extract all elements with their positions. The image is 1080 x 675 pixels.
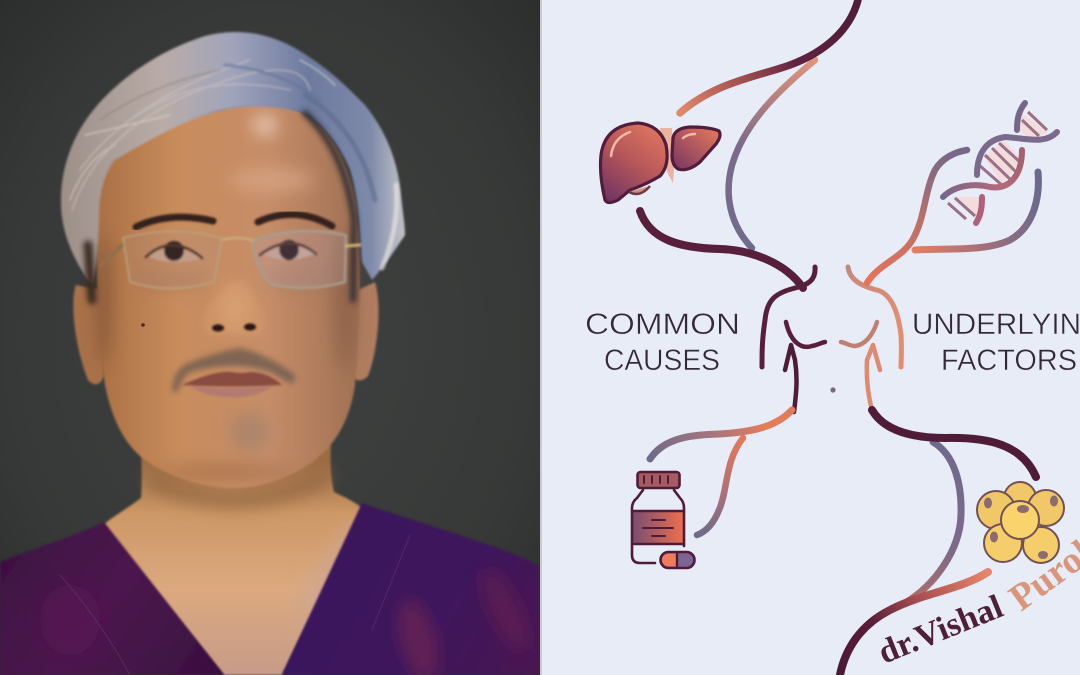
bottle marks xyxy=(643,476,673,536)
left arrow stem xyxy=(785,345,797,412)
panel: portrait photo xyxy=(0,0,540,675)
lips xyxy=(182,372,282,397)
bottle outline xyxy=(632,490,684,563)
icon: DNA helix xyxy=(943,103,1057,223)
text: common causes xyxy=(585,308,740,377)
lower left cell xyxy=(984,524,1022,562)
glasses xyxy=(102,231,360,288)
moustache xyxy=(172,348,296,392)
left panel edge xyxy=(540,0,542,675)
nose xyxy=(202,280,266,337)
heading line: CAUSES: CAUSES xyxy=(604,344,720,377)
bottle label xyxy=(633,511,684,544)
scrub top right side xyxy=(282,503,540,675)
panel: causes and factors diagram xyxy=(540,0,1080,675)
neck shading xyxy=(145,465,360,650)
liver shine xyxy=(611,132,695,156)
liver ligament xyxy=(660,128,674,183)
left lower sub-branch xyxy=(697,438,743,535)
eyebrows xyxy=(136,214,332,227)
face shading and highlights xyxy=(97,115,357,479)
photo background xyxy=(0,0,540,675)
heading line: COMMON: COMMON xyxy=(585,308,740,341)
hair xyxy=(61,32,405,285)
scrub top left side xyxy=(0,522,224,675)
bottle cap xyxy=(638,472,680,488)
DNA strands xyxy=(943,103,1057,223)
scrub highlights xyxy=(40,562,539,675)
bottom branch xyxy=(840,572,988,675)
hair strands xyxy=(70,60,397,268)
liver left lobe xyxy=(600,123,667,202)
left lower branch xyxy=(650,410,792,459)
right lower grey branch xyxy=(905,442,961,603)
left inner curve xyxy=(786,322,825,347)
left cell xyxy=(977,491,1015,529)
right cell xyxy=(1028,490,1064,526)
DNA rung fill xyxy=(952,113,1048,218)
right body outline xyxy=(848,267,901,367)
mole xyxy=(141,323,145,327)
right top branch A xyxy=(867,150,967,283)
ears xyxy=(73,282,379,384)
lower right cell xyxy=(1023,527,1059,563)
DNA rungs xyxy=(948,112,1047,219)
neck xyxy=(103,445,362,675)
front cell xyxy=(1001,501,1039,539)
heading line: FACTORS: FACTORS xyxy=(941,344,1077,377)
center dot xyxy=(830,387,836,393)
scrub seams xyxy=(60,535,410,675)
right inner curve xyxy=(841,322,877,346)
branch: liver dark xyxy=(640,211,803,288)
back cell xyxy=(1004,482,1036,514)
panel background xyxy=(540,0,1080,675)
dark hairline at temples xyxy=(88,113,354,300)
right top branch B xyxy=(915,172,1038,250)
signature name dark: dr.Vishal xyxy=(873,588,1008,671)
left body outline xyxy=(762,267,815,367)
icon: medicine bottle and pill xyxy=(632,472,694,568)
eyes xyxy=(146,240,316,262)
icon: fat cells xyxy=(977,482,1064,563)
branch: top dark to orange xyxy=(680,0,858,113)
text: underlying factors xyxy=(912,308,1080,377)
right arrow stem xyxy=(867,345,880,410)
branch: top grey-orange xyxy=(729,60,815,248)
liver right lobe xyxy=(672,127,720,170)
icon: liver xyxy=(600,123,720,202)
signature: dr.Vishal Purohit xyxy=(873,512,1080,671)
pill xyxy=(660,552,694,568)
right lower dark branch xyxy=(872,410,1036,477)
cell nuclei xyxy=(984,496,1058,559)
face xyxy=(96,104,360,488)
gallbladder xyxy=(629,186,650,194)
